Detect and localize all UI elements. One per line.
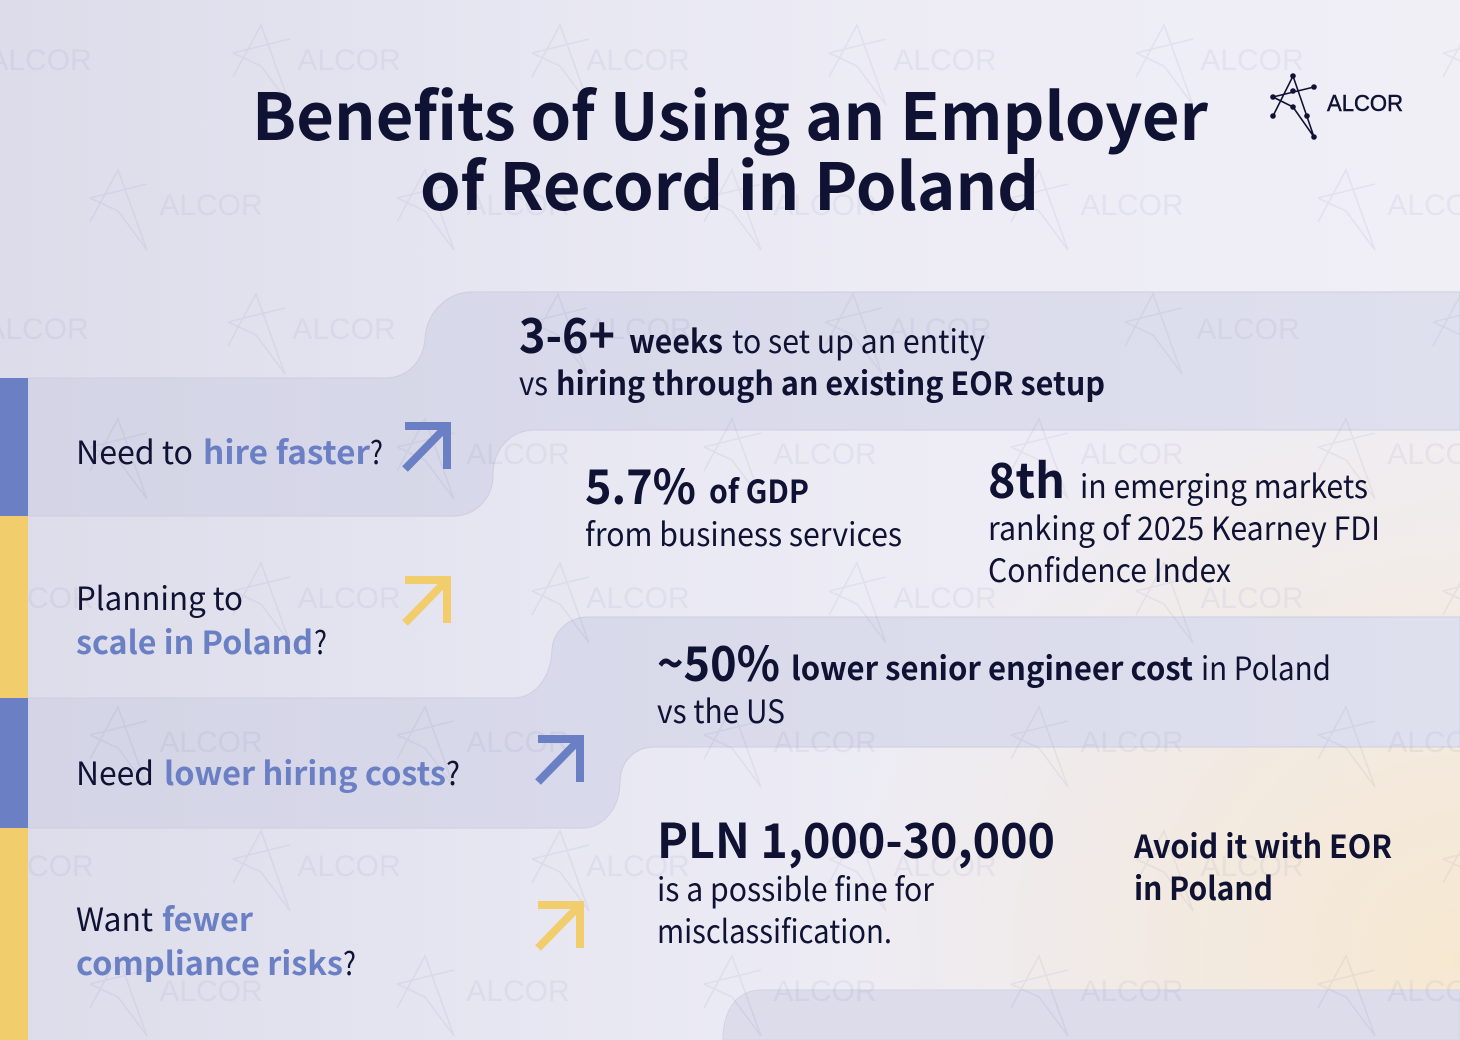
stat: 3-6+ weeks: vs: [519, 359, 548, 405]
question: scale in Poland: scale in Poland: [76, 618, 313, 664]
watermark pattern: ALCOR: [1080, 975, 1184, 1008]
watermark pattern: ALCOR: [159, 726, 263, 759]
question: scale in Poland: [76, 574, 327, 664]
stat: 3-6+ weeks: 3-6+: [519, 297, 615, 367]
title: of Record in Poland: [420, 135, 1039, 229]
watermark pattern: ALCOR: [588, 313, 692, 346]
stat: 8th ranking: 8th: [988, 442, 1065, 512]
watermark pattern: ALCOR: [888, 313, 992, 346]
watermark pattern: ALCOR: [297, 582, 401, 615]
watermark pattern: ALCOR: [297, 44, 401, 77]
callout: avoid with EOR: Avoid it with EOR: [1133, 822, 1392, 868]
stat: 8th ranking: [988, 442, 1380, 592]
stat: 8th ranking: ranking of 2025 Kearney FDI: [988, 504, 1380, 550]
stat: ~50% lower cost: vs the US: [657, 687, 785, 733]
watermark pattern: ALCOR: [466, 438, 570, 471]
band: scale and lower costs: [28, 617, 1460, 828]
watermark pattern: ALCOR: [773, 726, 877, 759]
stat: PLN fine: is a possible fine for: [657, 865, 935, 911]
watermark pattern: ALCOR: [1200, 850, 1304, 883]
watermark pattern: ALCOR: [1080, 438, 1184, 471]
logo: ALCOR: ALCOR: [1327, 90, 1403, 116]
stat: 5.7% of GDP: from business services: [585, 510, 902, 556]
watermark pattern: ALCOR: [159, 975, 263, 1008]
question: scale in Poland: ?: [314, 618, 327, 664]
stat: 8th ranking: Confidence Index: [988, 546, 1231, 592]
arrow: lower hiring costs: [538, 739, 580, 782]
stat: ~50% lower cost: ~50%: [657, 625, 780, 695]
watermark pattern: ALCOR: [586, 850, 690, 883]
left colour stripes: [0, 378, 28, 1040]
watermark pattern: ALCOR: [773, 975, 877, 1008]
stat: ~50% lower cost: in Poland: [1201, 644, 1331, 690]
watermark pattern: ALCOR: [586, 44, 690, 77]
watermark pattern: ALCOR: [466, 726, 570, 759]
band: bottom: [723, 990, 1460, 1040]
watermark pattern: ALCOR: [893, 44, 997, 77]
callout: avoid with EOR: [1133, 822, 1392, 910]
logo: ALCOR: [1270, 73, 1403, 140]
watermark pattern: ALCOR: [159, 189, 263, 222]
stat: 5.7% of GDP: of GDP: [709, 467, 809, 513]
watermark pattern: ALCOR: [1080, 189, 1184, 222]
watermark pattern: ALCOR: [297, 850, 401, 883]
watermark pattern: ALCOR: [1196, 313, 1300, 346]
watermark pattern: ALCOR: [466, 975, 570, 1008]
title: [252, 65, 1209, 229]
stat: 3-6+ weeks: weeks: [629, 317, 723, 363]
question: lower hiring costs: ?: [446, 749, 460, 795]
question: hire faster: ?: [370, 428, 383, 474]
stat: ~50% lower cost: lower senior engineer cost: [791, 644, 1193, 690]
question: hire faster: Need to: [76, 428, 193, 474]
arrow: hire faster: [405, 426, 447, 469]
watermark pattern: ALCOR: [893, 582, 997, 615]
stat: PLN fine: PLN 1,000-30,000: [657, 802, 1055, 872]
arrow: compliance risks: [538, 905, 580, 948]
stat: 5.7% of GDP: [585, 448, 902, 556]
watermark pattern: ALCOR: [1080, 726, 1184, 759]
stat: 3-6+ weeks: to set up an entity: [732, 317, 985, 363]
question: scale in Poland: Planning to: [76, 574, 243, 620]
question: compliance risks: ?: [343, 939, 356, 985]
watermark pattern: ALCOR: [292, 313, 396, 346]
watermark pattern: ALCOR: [1200, 44, 1304, 77]
question: compliance risks: fewer: [162, 895, 253, 941]
band: hire faster: [28, 292, 1460, 516]
watermark pattern: ALCOR: [586, 582, 690, 615]
stat: 8th ranking: in emerging markets: [1080, 462, 1368, 508]
question: compliance risks: [76, 895, 356, 985]
watermark pattern: ALCOR: [466, 189, 570, 222]
stat: PLN fine: [657, 802, 1055, 953]
watermark pattern: ALCOR: [773, 438, 877, 471]
watermark pattern: ALCOR: [893, 850, 997, 883]
arrow: scale in Poland: [405, 580, 447, 623]
stat: 5.7% of GDP: 5.7%: [585, 448, 696, 518]
stat: 3-6+ weeks: hiring through an existing EOR setup: [556, 359, 1105, 405]
question: lower hiring costs: lower hiring costs: [164, 749, 446, 795]
watermark pattern: ALCOR: [1200, 582, 1304, 615]
question: hire faster: hire faster: [203, 428, 370, 474]
title: Benefits of Using an Employer: [252, 65, 1209, 159]
question: compliance risks: compliance risks: [76, 939, 343, 985]
stat: PLN fine: misclassification.: [657, 907, 892, 953]
question: compliance risks: Want: [76, 895, 153, 941]
watermark pattern: ALCOR: [773, 189, 877, 222]
callout: avoid with EOR: in Poland: [1134, 864, 1273, 910]
question: lower hiring costs: Need: [76, 749, 154, 795]
question: hire faster: [76, 428, 383, 474]
stat: 3-6+ weeks: [519, 297, 1105, 405]
stat: ~50% lower cost: [657, 625, 1331, 733]
